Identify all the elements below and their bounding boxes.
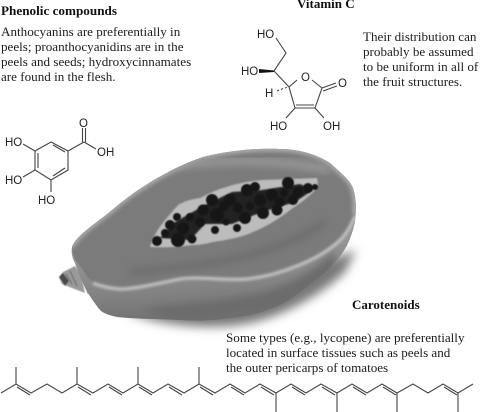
text block: phenolic compounds description [1, 24, 191, 84]
chemical structure: vitamin C: O [301, 72, 310, 84]
text block: carotenoids description: the outer pericarps of tomatoes [226, 360, 388, 375]
text block: vitamin C description: probably be assumed [363, 44, 474, 59]
papaya seed mass [160, 184, 313, 240]
text block: phenolic compounds description: Anthocyanins are preferentially in [1, 24, 181, 39]
papaya flesh light rim [93, 216, 355, 289]
text block: carotenoids description: Some types (e.g., lycopene) are preferentially [226, 330, 465, 345]
papaya flesh [72, 149, 356, 288]
heading: Phenolic compounds: Phenolic compounds [1, 3, 117, 18]
papaya body [72, 148, 356, 321]
papaya cavity [150, 178, 318, 247]
illustration: halved papaya fruit [59, 140, 360, 330]
text block: vitamin C description [363, 29, 479, 89]
text block: phenolic compounds description: are found in the flesh. [1, 69, 116, 84]
text block: phenolic compounds description: peels; proanthocyanidins are in the [1, 39, 184, 54]
text block: carotenoids description: located in surface tissues such as peels and [226, 345, 451, 360]
chemical structure: gallic acid: HO [5, 175, 22, 187]
chemical structure: gallic acid: OH [97, 147, 114, 159]
heading: Carotenoids: Carotenoids [352, 297, 420, 312]
papaya seeds [152, 177, 318, 247]
chemical structure: gallic acid [5, 118, 114, 207]
papaya skin [72, 148, 356, 320]
text block: carotenoids description [226, 330, 465, 375]
papaya shadow [125, 250, 356, 327]
chemical structure: vitamin C [241, 29, 347, 133]
chemical structure: vitamin C: OH [323, 121, 340, 133]
chemical structure: vitamin C: O [338, 78, 347, 90]
text block: phenolic compounds description: peels and seeds; hydroxycinnamates [1, 54, 191, 69]
chemical structure: gallic acid: HO [5, 137, 22, 149]
papaya stem [59, 266, 93, 294]
chemical structure: vitamin C: H [265, 88, 273, 100]
papaya flesh light outer band [72, 149, 356, 247]
text block: vitamin C description: Their distribution can [363, 29, 477, 44]
chemical structure: vitamin C: HO [257, 29, 274, 41]
papaya skin dark patches [156, 252, 338, 316]
text block: vitamin C description: the fruit structures. [363, 74, 462, 89]
chemical structure: vitamin C: HO [241, 66, 258, 78]
chemical structure: gallic acid: HO [38, 195, 55, 207]
chemical structure: gallic acid: O [79, 118, 88, 130]
papaya flesh shading near rim [130, 222, 325, 272]
chemical structure: vitamin C: HO [270, 121, 287, 133]
text block: vitamin C description: to be uniform in all of [363, 59, 479, 74]
chemical structure: lycopene chain [1, 367, 473, 412]
